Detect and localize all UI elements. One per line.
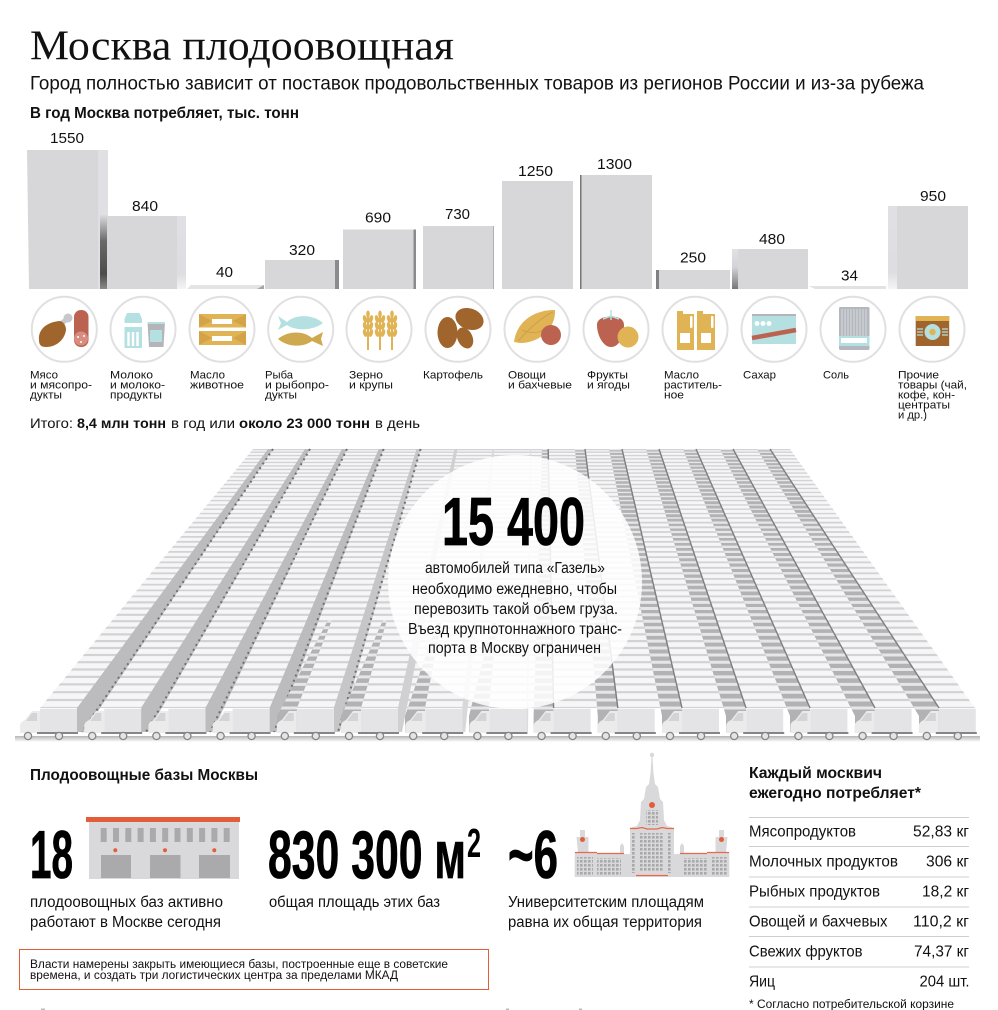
callout text [408,560,622,657]
front row of trucks [20,708,977,740]
big number: 15 400 [442,484,585,560]
truck field illustration [0,449,998,742]
label: butter [190,370,244,392]
row: fruit: Свежих фруктов [749,944,862,961]
category labels [30,370,967,422]
bar: vegetable oil 250: 250 [680,251,706,267]
label: fish: дукты [265,390,297,402]
stat: total area: 2 [467,820,481,866]
bar: vegetable oil 250 [656,251,730,289]
row: meat: 52,83 кг [913,824,969,841]
stat: university areas: ~6 [508,817,558,893]
row: fish: 18,2 кг [922,884,969,901]
bar: potato 730: 730 [445,207,470,223]
icon: vegetables [504,297,570,362]
label: milk [110,370,165,402]
icon: fish [268,297,333,362]
label: grain: Зерно [349,370,383,382]
label: fruit: Фрукты [587,370,628,382]
label: other goods: кофе, кон- [898,390,955,402]
stat: 18 bases: плодоовощных баз активно [30,894,223,911]
row: vegetables: Овощей и бахчевых [749,914,888,931]
bar: sugar 480: 480 [759,232,785,248]
row: eggs: Яиц [749,974,775,991]
label: milk: Молоко [110,370,153,382]
bar: other 950 [888,189,968,289]
bar: grain 690 [343,211,416,289]
total line: в день [375,415,420,431]
total line: в год или [171,415,235,431]
label: fish: и рыбопро- [265,380,329,392]
label: fruit: и ягоды [587,380,630,392]
label: grain: и крупы [349,380,393,392]
row: dairy: Молочных продуктов [749,854,898,871]
panel heading: Каждый москвич [749,765,882,782]
icon: Moscow State University building [575,753,729,877]
label: fish [265,370,329,402]
panel heading [749,765,922,802]
row: eggs: 204 шт. [920,974,970,991]
label: meat: дукты [30,390,62,402]
bar: fruit 1300: 1300 [597,157,632,173]
icon: vegetable oil [662,297,728,362]
label: vegetable oil: раститель- [664,380,722,392]
label: other goods: Прочие [898,370,939,382]
icon: warehouse [86,817,240,879]
bar: sugar 480 [732,232,808,289]
stat: university areas: равна их общая территория [508,914,702,931]
clipped text remnants at bottom edge [41,1008,582,1010]
bar: milk 840: 840 [132,199,158,215]
stat: total area [268,817,481,911]
bar: meat 1550: 1550 [50,131,84,147]
bar: fruit 1300 [580,157,652,289]
bar: vegetables 1250 [502,164,573,289]
bar: fish 320: 320 [289,243,315,259]
row: fish: Рыбных продуктов [749,884,880,901]
note box: Власти намерены закрыть имеющиеся базы, построенные еще в советские [30,959,448,971]
panel: per-capita consumption [749,765,970,1010]
label: milk: продукты [110,390,162,402]
label: potato: Картофель [423,370,483,382]
icon: milk [110,297,176,362]
bar: fish 320 [265,243,339,289]
bar: salt 34: 34 [841,269,858,285]
stat: 18 bases: 18 [30,817,73,893]
label: milk: и молоко- [110,380,165,392]
heading: fruit and vegetable bases: Плодоовощные базы Москвы [30,767,258,784]
ground shadow [15,736,980,742]
row: vegetables [749,914,969,931]
stat: university areas [508,817,704,931]
icon: meat [32,297,97,362]
row: eggs [749,974,970,991]
icon: other goods [900,297,964,362]
row: fish [749,884,969,901]
label: vegetables: Овощи [508,370,546,382]
total line [30,415,420,431]
row: dairy [749,854,969,871]
callout text: перевозить такой объем груза. [414,601,618,618]
total line: около 23 000 тонн [239,415,370,431]
row: dairy: 306 кг [926,854,969,871]
label: sugar: Сахар [743,370,776,382]
label: other goods: центраты [898,400,950,412]
row: meat: Мясопродуктов [749,824,856,841]
label: fish: Рыба [265,370,294,382]
bar: grain 690: 690 [365,211,391,227]
heading: annual consumption: В год Москва потребляет, тыс. тонн [30,105,299,122]
label: meat [30,370,92,402]
bar: meat 1550 [27,131,108,289]
label: meat: Мясо [30,370,58,382]
label: vegetable oil: Масло [664,370,699,382]
label: other goods: товары (чай, [898,380,967,392]
stat: total area: 830 300 м [268,817,466,893]
row: fruit [749,944,969,961]
subtitle: Город полностью зависит от поставок продовольственных товаров из регионов России и из-за рубежа [30,72,924,94]
bar: potato 730 [423,207,494,289]
total line: Итого: [30,415,73,431]
label: vegetable oil: ное [664,390,684,402]
icon: salt [820,297,886,362]
icon: sugar [742,297,806,362]
callout text: необходимо ежедневно, чтобы [412,581,617,598]
stat: 18 bases: работают в Москве сегодня [30,914,221,931]
icon: grain [346,297,412,362]
stat: 18 bases [30,817,223,931]
label: salt: Соль [823,370,849,382]
bar: butter 40: 40 [216,265,233,281]
label: other goods: и др.) [898,410,927,422]
callout text: автомобилей типа «Газель» [425,560,605,577]
stat: university areas: Университетским площадям [508,894,704,911]
label: butter: Масло [190,370,225,382]
total line: 8,4 млн тонн [77,415,166,431]
bar: vegetables 1250: 1250 [518,164,553,180]
label: vegetable oil [664,370,722,402]
row: fruit: 74,37 кг [914,944,969,961]
callout circle: 15 400 trucks [388,455,642,709]
icon: fruit [584,297,648,362]
label: fruit [587,370,630,392]
callout text: Въезд крупнотоннажного транс- [408,621,622,638]
row: vegetables: 110,2 кг [913,914,969,931]
label: meat: и мясопро- [30,380,92,392]
label: other goods [898,370,967,422]
stat: total area: общая площадь этих баз [269,894,440,911]
callout text: порта в Москву ограничен [428,640,601,657]
label: grain [349,370,393,392]
row: meat [749,824,969,841]
note box [20,950,488,990]
side bands of left columns [77,449,531,732]
panel heading: ежегодно потребляет* [749,785,922,802]
icon: butter [190,297,254,362]
bar: butter 40 [187,265,264,289]
icon: potato [426,297,490,362]
bar: milk 840 [107,199,186,289]
cab stacks of right columns [277,449,939,732]
label: butter: животное [190,380,244,392]
note box: времена, и создать три логистических центра за пределами МКАД [30,970,398,982]
label: vegetables [508,370,572,392]
title: Москва плодоовощная [30,24,454,70]
bar: other 950: 950 [920,189,946,205]
label: vegetables: и бахчевые [508,380,572,392]
bar chart: consumption by product [27,131,968,289]
bar: salt 34 [809,269,886,289]
